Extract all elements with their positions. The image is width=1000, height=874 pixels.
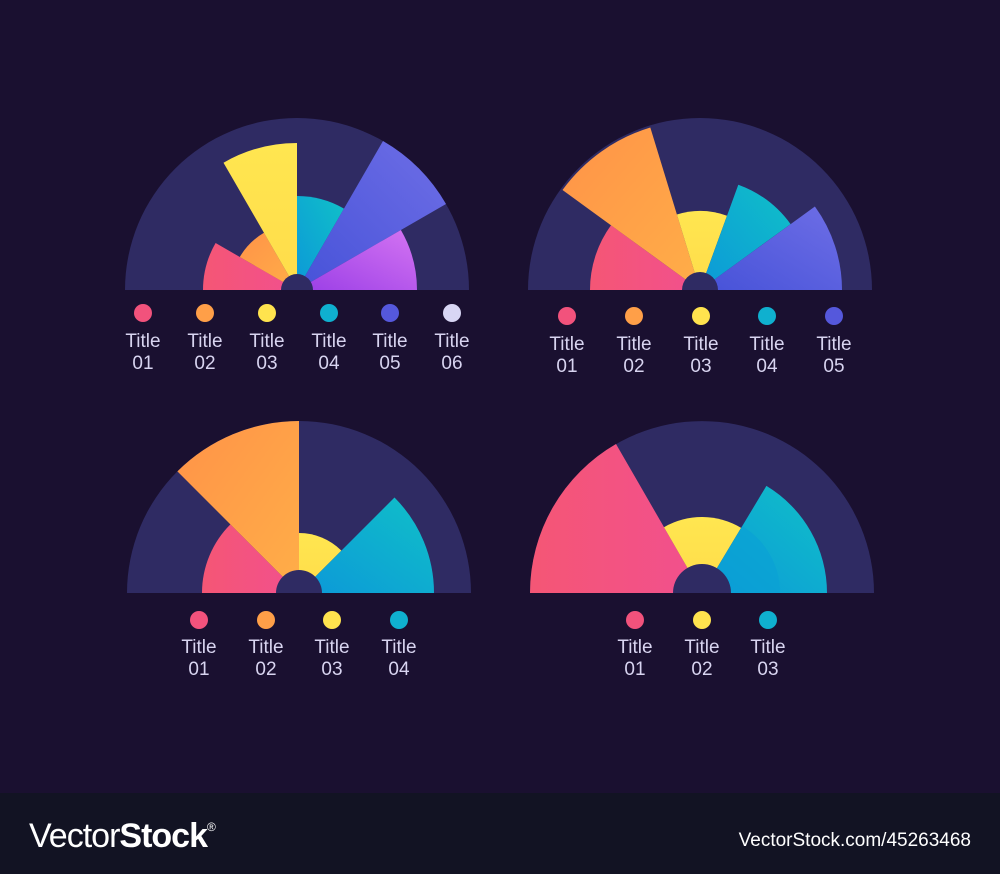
chart 4: three-segment semicircle (530, 421, 874, 593)
legend 1: 02 (194, 353, 216, 374)
footer url: VectorStock.com/45263468 (739, 830, 971, 851)
chart 3: four-segment semicircle (127, 421, 471, 593)
segment: teal (702, 486, 827, 593)
legend 1 (125, 304, 470, 374)
chart 1: six-segment semicircle (125, 118, 469, 290)
legend 3: Title (381, 637, 417, 658)
legend 1: 06 (441, 353, 463, 374)
legend 2: Title (616, 334, 652, 355)
segment: pink (530, 444, 702, 593)
legend 4: Title (750, 637, 786, 658)
legend 1: Title (125, 331, 161, 352)
legend 1: Title (187, 331, 223, 352)
legend 1: Title (249, 331, 285, 352)
legend 2: 04 (756, 356, 778, 377)
legend 1: Title (372, 331, 408, 352)
legend 2: 01 (556, 356, 578, 377)
segment: yellow (299, 533, 341, 593)
segment: blue (700, 206, 842, 290)
legend 3: Title (181, 637, 217, 658)
legend 3: Title (248, 637, 284, 658)
segment: purple (297, 230, 417, 290)
legend 2: Title (683, 334, 719, 355)
legend 2: Title (549, 334, 585, 355)
segment: pink (590, 225, 700, 290)
segment: teal (297, 196, 344, 290)
legend 4: Title (684, 637, 720, 658)
legend 1: Title (434, 331, 470, 352)
segment: teal (700, 185, 791, 290)
legend 2: 02 (623, 356, 645, 377)
legend 2: 05 (823, 356, 845, 377)
legend 3: 01 (188, 659, 210, 680)
legend 1: 04 (318, 353, 340, 374)
legend 1: 03 (256, 353, 278, 374)
legend 3: Title (314, 637, 350, 658)
legend 3 (181, 611, 417, 680)
hub (276, 570, 322, 593)
hub (682, 272, 718, 290)
legend 2: Title (749, 334, 785, 355)
legend 3: 02 (255, 659, 277, 680)
legend 1: Title (311, 331, 347, 352)
hub (673, 564, 731, 593)
legend 1: 01 (132, 353, 154, 374)
legend 4: 03 (757, 659, 779, 680)
legend 4: Title (617, 637, 653, 658)
segment: pink (203, 243, 297, 290)
legend 4: 01 (624, 659, 646, 680)
legend 2: Title (816, 334, 852, 355)
hub (281, 274, 313, 290)
legend 4: 02 (691, 659, 713, 680)
legend 2: 03 (690, 356, 712, 377)
footer bar (0, 793, 1000, 874)
segment: teal (299, 498, 434, 593)
legend 3: 03 (321, 659, 343, 680)
footer logo: VectorStock (29, 817, 207, 855)
segment: orange (177, 421, 299, 593)
chart 2: five-segment semicircle (528, 118, 872, 290)
legend 1: 05 (379, 353, 401, 374)
segment: yellow (224, 143, 297, 290)
segment: yellow (677, 211, 727, 290)
footer logo: ® (207, 820, 216, 834)
legend 4 (617, 611, 786, 680)
segment: pink (202, 524, 299, 593)
legend 2 (549, 307, 852, 377)
segment: blue (297, 141, 446, 290)
segment: orange (240, 233, 297, 290)
segment: yellow (664, 517, 741, 593)
legend 3: 04 (388, 659, 410, 680)
segment: orange (562, 128, 700, 290)
